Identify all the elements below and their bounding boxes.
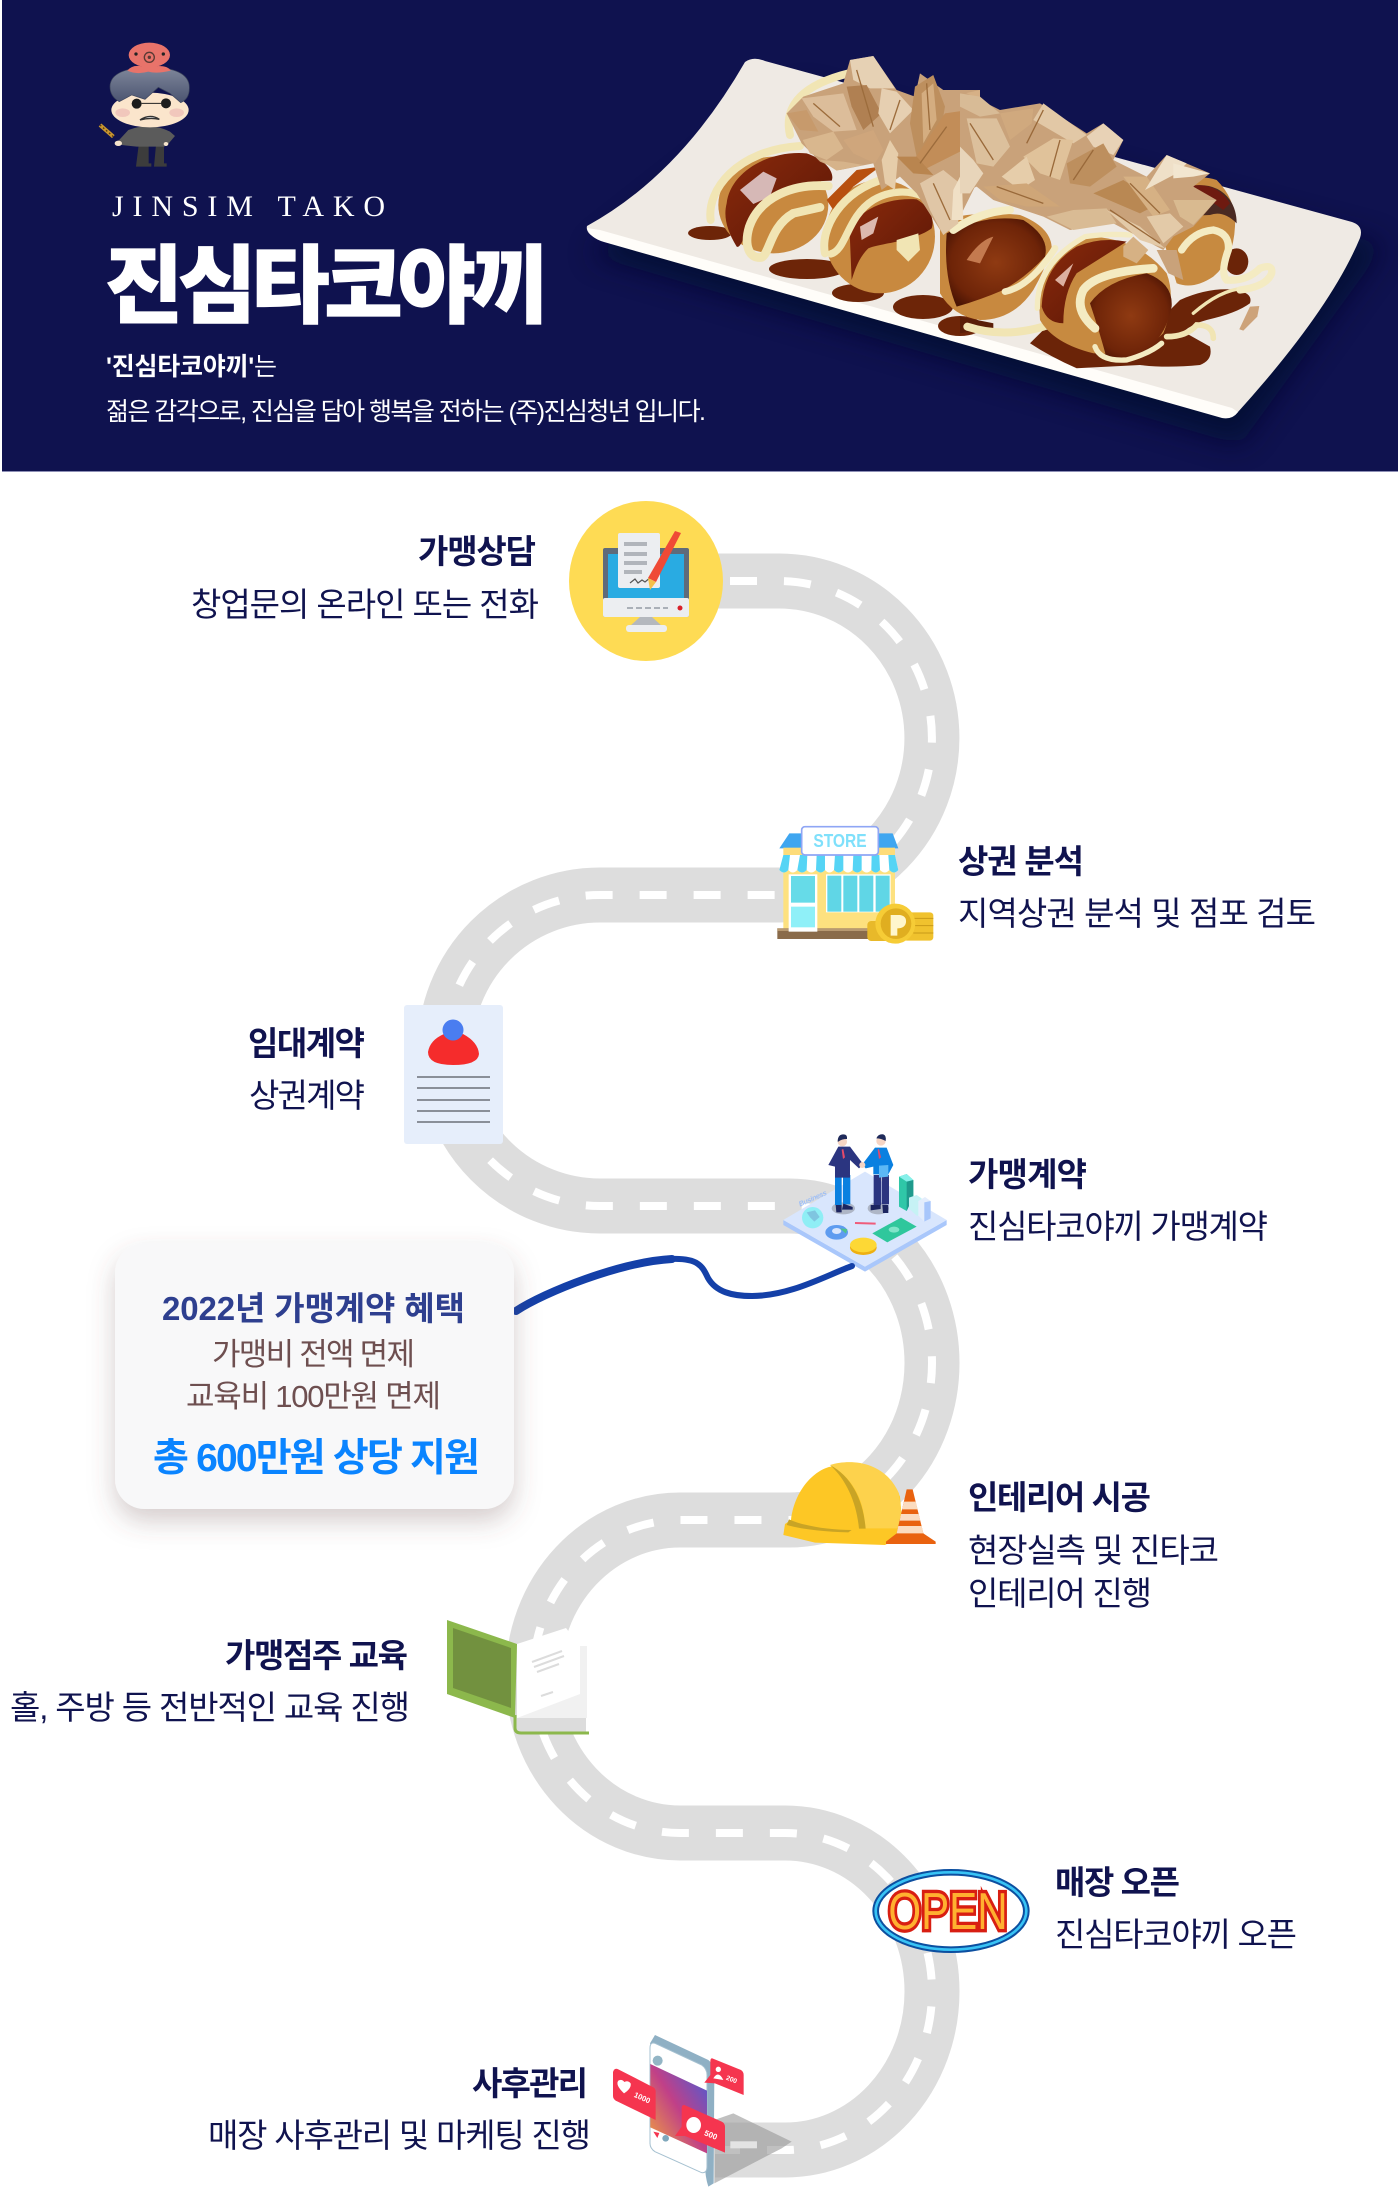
step heading: 상권 분석 (958, 843, 1084, 880)
ball A (940, 213, 1052, 320)
callout total: 총 600만원 상당 지원 (153, 1437, 480, 1480)
icon: open book (447, 1620, 589, 1733)
step heading: 가맹점주 교육 (225, 1637, 408, 1674)
header banner (2, 0, 1398, 472)
bonito flakes, left (787, 56, 980, 235)
sauce streams (960, 248, 1251, 368)
step description: 창업문의 온라인 또는 전화 (191, 586, 539, 623)
icon: phone social: 1000 (633, 2090, 652, 2105)
takoyaki 3, 4, 5 and right side sauce (940, 177, 1272, 368)
callout lines: 교육비 100만원 면제 (186, 1379, 441, 1414)
icon: business handshake platform (783, 1134, 947, 1272)
callout lines (186, 1337, 441, 1414)
icon: phone social: 200 (725, 2075, 738, 2085)
icon: mascot character (100, 43, 189, 167)
callout: 2022 benefits (115, 1243, 514, 1509)
step description: 지역상권 분석 및 점포 검토 (958, 895, 1316, 932)
icon: store (777, 827, 933, 944)
step 6: 가맹점주 교육 (10, 1620, 589, 1733)
icon: phone social (613, 2035, 792, 2187)
step description: 진심타코야끼 가맹계약 (968, 1208, 1268, 1245)
step description: 진심타코야끼 오픈 (1055, 1916, 1297, 1953)
intro text: 젊은 감각으로, 진심을 담아 행복을 전하는 (주)진심청년 입니다. (106, 398, 706, 426)
icon: computer contract (569, 501, 723, 661)
step heading: 인테리어 시공 (968, 1479, 1151, 1516)
step 8: 사후관리 (208, 2035, 792, 2187)
icon: neon open sign (876, 1872, 1026, 1950)
bonito flakes, right (960, 90, 1217, 280)
ball C (1163, 177, 1235, 286)
step heading: 임대계약 (248, 1025, 365, 1062)
back takoyaki (789, 73, 850, 135)
step 7: 매장 오픈 (876, 1864, 1297, 1953)
icon: phone social: 500 (703, 2128, 719, 2142)
step heading: 사후관리 (472, 2065, 588, 2102)
photo: takoyaki plate (587, 56, 1385, 445)
step heading: 매장 오픈 (1055, 1864, 1180, 1901)
step 1: 가맹상담 (191, 501, 723, 661)
stray flake (1239, 306, 1259, 331)
step description: 인테리어 진행 (968, 1575, 1152, 1612)
icon: neon open sign: OPEN (888, 1882, 1008, 1940)
intro text: '진심타코야끼'는 (106, 353, 277, 381)
icon: hard hat and cone (783, 1462, 936, 1545)
eyebrow: JINSIM TAKO: JINSIM TAKO (112, 190, 385, 223)
takoyaki 1 (710, 146, 832, 258)
takoyaki 2 (824, 167, 935, 293)
callout lines: 가맹비 전액 면제 (212, 1337, 415, 1372)
step 5: 인테리어 시공 (783, 1462, 1219, 1612)
sauce puddles (688, 226, 982, 336)
callout heading: 2022년 가맹계약 혜택 (162, 1290, 465, 1327)
step 3: 임대계약 (248, 1005, 503, 1144)
road (445, 581, 932, 2150)
step description: 현장실측 및 진타코 (968, 1532, 1219, 1569)
intro text (106, 353, 706, 426)
ball B (1038, 237, 1171, 354)
connector: blue line (516, 1259, 852, 1311)
step heading: 가맹상담 (418, 533, 536, 570)
icon: business handshake platform: Business (797, 1188, 828, 1208)
step 4: 가맹계약 (783, 1134, 1268, 1272)
step heading: 가맹계약 (968, 1156, 1087, 1193)
icon: contract document (404, 1005, 503, 1144)
title: 진심타코야끼 (105, 240, 549, 335)
step description (968, 1532, 1219, 1612)
step 2: 상권 분석 (777, 827, 1316, 944)
icon: store: STORE (813, 830, 867, 851)
step description: 홀, 주방 등 전반적인 교육 진행 (10, 1689, 410, 1726)
step description: 상권계약 (249, 1077, 365, 1114)
step description: 매장 사후관리 및 마케팅 진행 (208, 2117, 591, 2154)
